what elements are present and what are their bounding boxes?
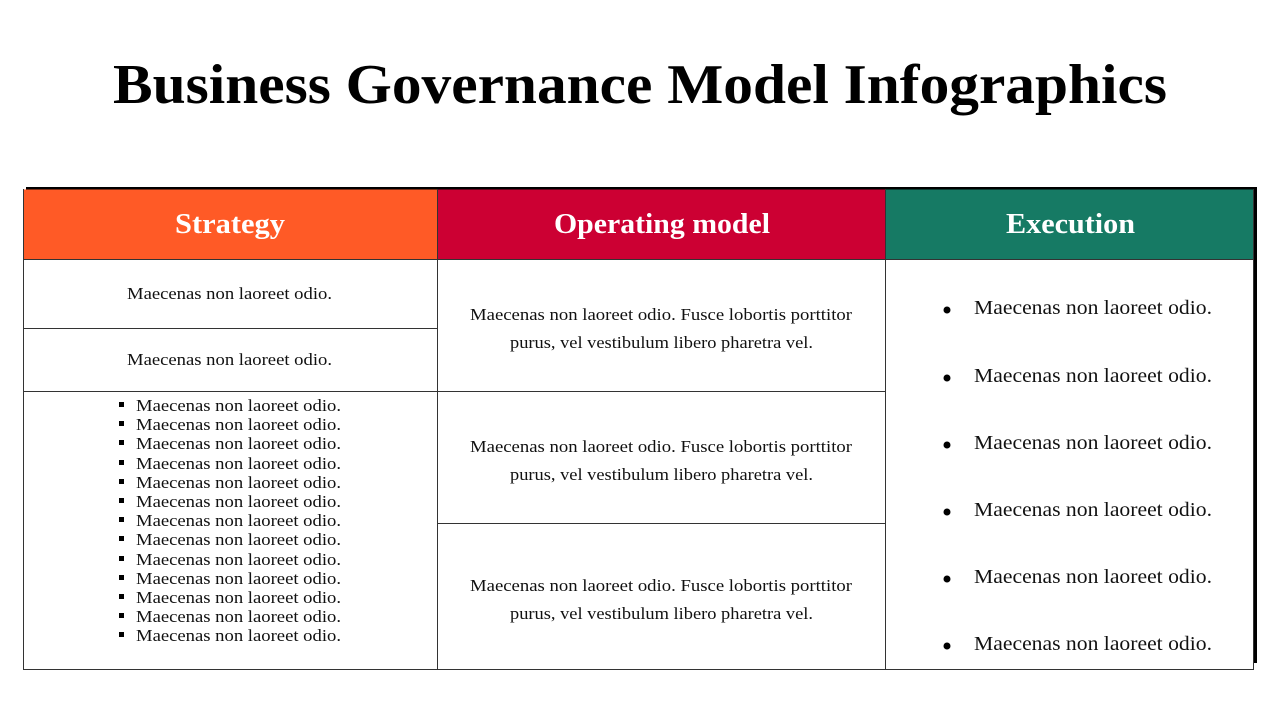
operating model header [438,190,886,260]
operating model row 3: Maecenas non laoreet odio. Fusce lobortis porttitor [470,576,852,595]
strategy bullet list: Maecenas non laoreet odio. [136,588,341,607]
operating model row 2: purus, vel vestibulum libero pharetra vel. [510,465,813,484]
strategy bullet list: Maecenas non laoreet odio. [136,530,341,549]
operating model row 2 [470,437,852,484]
strategy row 1: Maecenas non laoreet odio. [127,284,332,303]
execution header: Execution [1006,209,1135,240]
strategy header [24,190,438,260]
strategy bullet list: Maecenas non laoreet odio. [136,511,341,530]
execution bullet list: Maecenas non laoreet odio. [974,499,1212,521]
operating model header: Operating model [554,209,770,240]
table shadow frame [26,188,1256,663]
strategy bullet list: Maecenas non laoreet odio. [136,492,341,511]
title: Business Governance Model Infographics [113,54,1167,116]
strategy bullet list: Maecenas non laoreet odio. [136,550,341,569]
execution bullet list: Maecenas non laoreet odio. [974,633,1212,655]
operating model row 3 [470,576,852,623]
execution bullet list: Maecenas non laoreet odio. [974,432,1212,454]
execution bullet list [944,297,1212,655]
execution bullet list: Maecenas non laoreet odio. [974,297,1212,319]
table grid lines [23,189,1254,670]
strategy header: Strategy [175,209,285,240]
strategy bullet list [119,396,341,645]
strategy row 2: Maecenas non laoreet odio. [127,350,332,369]
strategy bullet list: Maecenas non laoreet odio. [136,454,341,473]
operating model row 1: purus, vel vestibulum libero pharetra vel. [510,333,813,352]
execution header [886,190,1254,260]
strategy bullet list: Maecenas non laoreet odio. [136,473,341,492]
operating model row 2: Maecenas non laoreet odio. Fusce lobortis porttitor [470,437,852,456]
panel: strategy column [24,190,438,645]
strategy bullet list: Maecenas non laoreet odio. [136,626,341,645]
panel: execution column [886,190,1254,655]
operating model row 1: Maecenas non laoreet odio. Fusce lobortis porttitor [470,305,852,324]
strategy bullet list: Maecenas non laoreet odio. [136,607,341,626]
strategy bullet list: Maecenas non laoreet odio. [136,434,341,453]
strategy bullet list: Maecenas non laoreet odio. [136,569,341,588]
execution bullet list: Maecenas non laoreet odio. [974,566,1212,588]
operating model row 1 [470,305,852,352]
execution bullet list: Maecenas non laoreet odio. [974,365,1212,387]
strategy bullet list: Maecenas non laoreet odio. [136,396,341,415]
operating model row 3: purus, vel vestibulum libero pharetra vel. [510,604,813,623]
panel: operating model column [438,190,886,623]
strategy bullet list: Maecenas non laoreet odio. [136,415,341,434]
